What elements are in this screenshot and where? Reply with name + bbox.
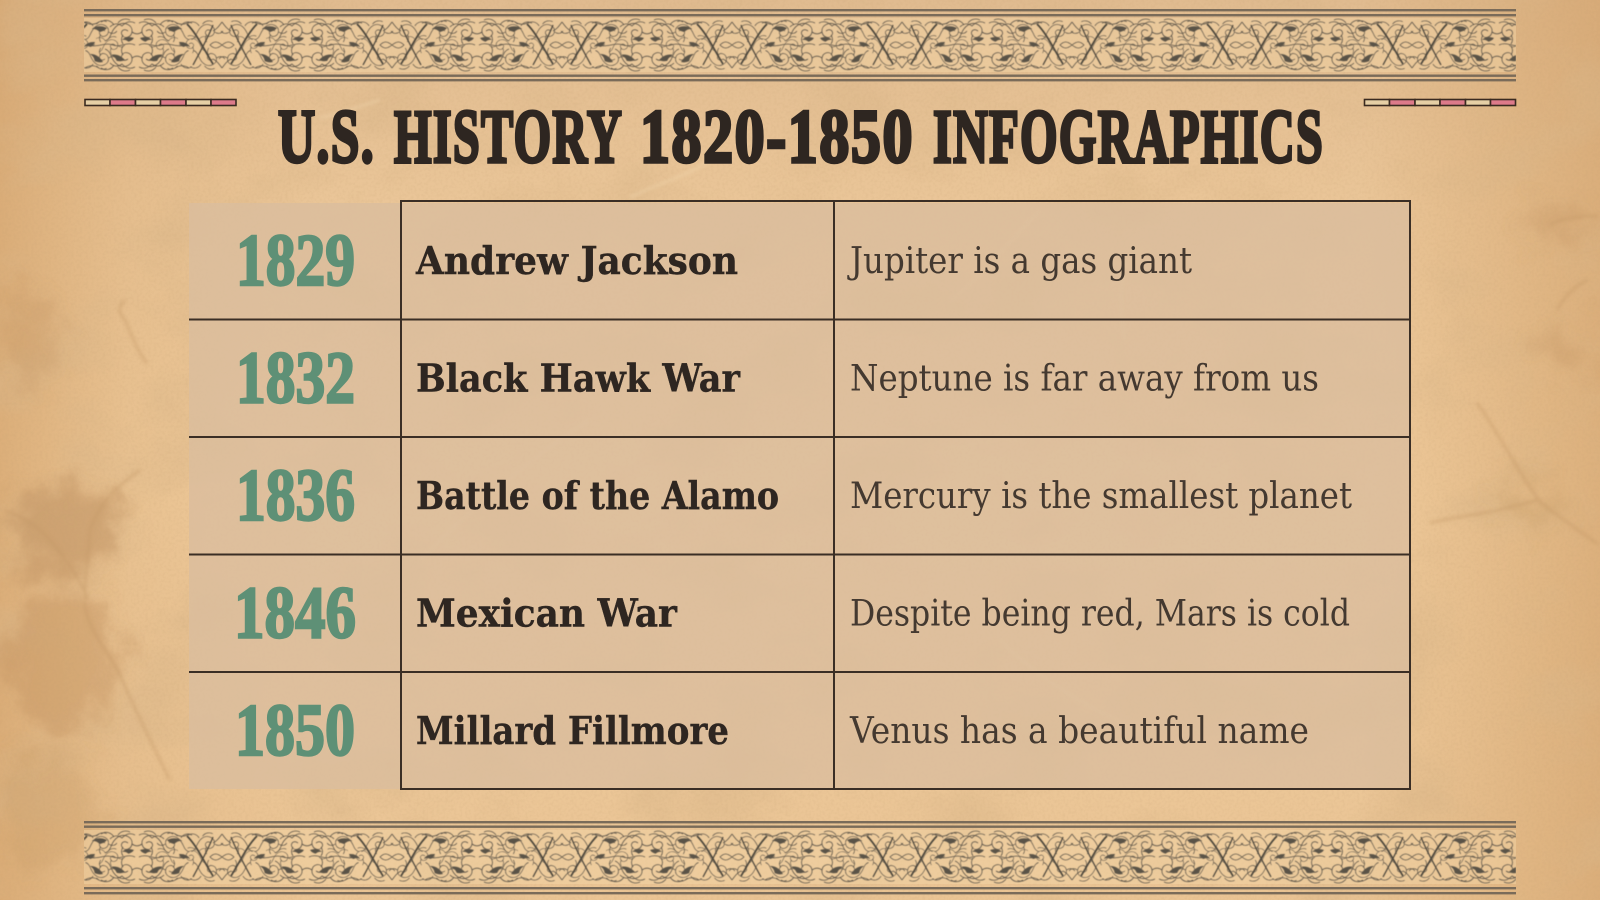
timeline table <box>189 201 1410 789</box>
top ornamental border <box>84 9 1516 81</box>
table grid lines <box>189 201 1410 789</box>
left striped accent bar <box>85 100 236 106</box>
row: 1832: 1832 <box>236 338 355 420</box>
row: 1836: Battle of the Alamo <box>416 473 779 518</box>
row: 1846 <box>234 572 1350 654</box>
title <box>278 95 1324 179</box>
row: 1850: Millard Fillmore <box>416 708 729 753</box>
row: 1832: Neptune is far away from us <box>850 358 1319 400</box>
row: 1836: Mercury is the smallest planet <box>850 476 1352 517</box>
row: 1836 <box>236 455 1352 537</box>
title: INFOGRAPHICS <box>933 95 1324 179</box>
row: 1836: 1836 <box>236 455 355 537</box>
row: 1850: 1850 <box>235 690 355 772</box>
right striped accent bar <box>1364 100 1516 106</box>
row: 1829: 1829 <box>236 220 355 302</box>
table background <box>189 203 1410 789</box>
row: 1850: Venus has a beautiful name <box>849 711 1309 752</box>
background: water stains <box>2 209 1596 870</box>
row: 1846: 1846 <box>234 572 356 654</box>
row: 1850 <box>235 690 1309 772</box>
title: U.S. <box>278 95 375 179</box>
row: 1832 <box>236 338 1319 420</box>
row: 1829: Jupiter is a gas giant <box>846 241 1192 282</box>
bottom ornamental border <box>84 821 1516 894</box>
row: 1846: Mexican War <box>416 590 678 636</box>
title: 1820-1850 <box>640 95 914 179</box>
row: 1829 <box>236 220 1192 302</box>
row: 1846: Despite being red, Mars is cold <box>850 594 1350 634</box>
background: paper creases <box>4 216 1598 780</box>
row: 1829: Andrew Jackson <box>415 238 738 283</box>
title: HISTORY <box>394 95 623 179</box>
row: 1832: Black Hawk War <box>416 356 741 400</box>
